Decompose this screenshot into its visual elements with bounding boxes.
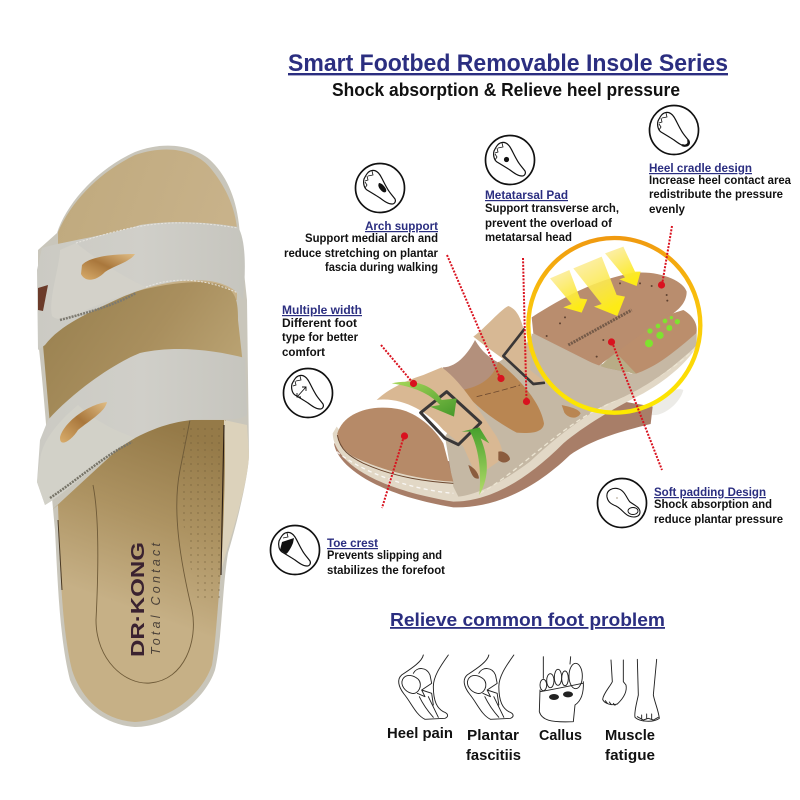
- strap slit: [38, 285, 48, 311]
- text block: multiple width: Different foot: [282, 318, 357, 330]
- label: plantar fascitiis: [466, 728, 521, 764]
- text block: toe crest: [327, 536, 445, 577]
- icon: callus: [539, 657, 583, 722]
- text block: arch support: Support medial arch and: [305, 233, 438, 245]
- icon: toe crest: [270, 526, 320, 574]
- callout line: heel: [658, 226, 672, 289]
- text block: toe crest: stabilizes the forefoot: [327, 565, 445, 577]
- text block: metatarsal pad: prevent the overload of: [485, 218, 612, 230]
- front strap: [37, 222, 245, 350]
- midsole rim: [333, 330, 697, 502]
- yellow pressure arrow right: [605, 247, 641, 286]
- front slots: [498, 451, 510, 463]
- rear slots: [552, 377, 579, 397]
- rear ornament: [60, 402, 107, 443]
- green pressure dots: [645, 316, 680, 347]
- beige rear quarter: [530, 333, 696, 404]
- text block: arch support: fascia during walking: [325, 262, 438, 274]
- subtitle: Shock absorption & Relieve heel pressure: [332, 80, 680, 100]
- left sandal top view: [37, 146, 249, 727]
- logo subtitle: Total Contact: [149, 542, 163, 655]
- text block: multiple width: comfort: [282, 347, 325, 359]
- rear strap: [37, 349, 247, 505]
- midsole stitching: [480, 349, 694, 493]
- text block: toe crest: Toe crest: [327, 536, 378, 550]
- middle lining: [443, 340, 503, 393]
- text block: heel cradle: Increase heel contact area: [649, 175, 792, 187]
- insole perforations: [546, 282, 668, 358]
- icon: arch support: [356, 164, 404, 212]
- text block: multiple width: Multiple width: [282, 303, 362, 317]
- front ornament: [81, 254, 135, 280]
- text block: arch support: [284, 219, 439, 274]
- icon: heel cradle: [650, 106, 698, 154]
- icon: muscle fatigue: [603, 659, 659, 721]
- insole contour: [93, 420, 193, 683]
- text block: multiple width: type for better: [282, 332, 359, 344]
- label: muscle fatigue: [605, 728, 655, 764]
- label: plantar fascitiis: Plantar: [467, 728, 519, 744]
- yellow ring: [528, 238, 700, 413]
- green arrow top: [392, 382, 457, 417]
- icon: heel pain: [399, 655, 448, 719]
- yellow pressure arrow left: [550, 270, 587, 313]
- text block: metatarsal pad: Metatarsal Pad: [485, 188, 568, 202]
- text block: heel cradle: [649, 161, 792, 216]
- text block: arch support: Arch support: [365, 219, 438, 233]
- front lace strap: [377, 367, 502, 477]
- middle footbed: [462, 362, 544, 433]
- text block: soft padding: Shock absorption and: [654, 499, 772, 511]
- right sandal side view: [333, 238, 700, 507]
- text block: heel cradle: Heel cradle design: [649, 161, 752, 175]
- right rim: [221, 420, 249, 572]
- yellow pressure arrow middle: [573, 257, 625, 316]
- front strap tab: [51, 243, 146, 319]
- toe bed: [58, 150, 237, 300]
- text block: metatarsal pad: [485, 188, 619, 244]
- text block: toe crest: Prevents slipping and: [327, 550, 442, 562]
- beige upper: [445, 330, 697, 497]
- text block: metatarsal pad: Support transverse arch,: [485, 203, 619, 215]
- outer sole: [38, 146, 249, 727]
- insole logo: [568, 310, 632, 345]
- text block: multiple width: [282, 303, 362, 359]
- icon: soft padding: [598, 478, 646, 528]
- rear lace strap: [473, 306, 555, 384]
- text block: heel cradle: evenly: [649, 204, 686, 216]
- perforation dots: [180, 425, 222, 600]
- callout line: soft padding: [608, 338, 662, 470]
- text block: arch support: reduce stretching on plantar: [284, 248, 439, 260]
- label: muscle fatigue: Muscle: [605, 728, 655, 744]
- heel foam: [652, 389, 683, 415]
- text block: soft padding: reduce plantar pressure: [654, 514, 783, 526]
- icon: plantar fasciitis: [464, 655, 514, 719]
- rear buckle: [503, 329, 545, 384]
- text block: heel cradle: redistribute the pressure: [649, 189, 783, 201]
- rear insole: [52, 420, 226, 722]
- wedge layer: [600, 352, 637, 374]
- text block: soft padding: [654, 485, 783, 526]
- icon: multiple width: [284, 368, 332, 418]
- icon: metatarsal pad: [486, 136, 534, 184]
- green arrow bottom: [462, 427, 489, 495]
- callout line: arch: [447, 255, 505, 382]
- text block: soft padding: Soft padding Design: [654, 485, 766, 499]
- logo: DR·KONG: [128, 542, 148, 657]
- title: Smart Footbed Removable Insole Series: [288, 50, 728, 77]
- opening between straps: [43, 282, 243, 425]
- callout line: multiple width: [381, 345, 417, 387]
- upper insole: [532, 272, 687, 366]
- wedge outsole: [334, 397, 653, 507]
- label: plantar fascitiis: fascitiis: [466, 748, 521, 764]
- front footbed: [337, 408, 453, 482]
- lower insole layer: [600, 310, 697, 374]
- text block: metatarsal pad: metatarsal head: [485, 232, 572, 244]
- heading: relieve common foot problem: Relieve common foot problem: [390, 610, 665, 630]
- label: muscle fatigue: fatigue: [605, 748, 655, 764]
- callout line: toe crest: [382, 432, 408, 508]
- front buckle: [421, 392, 481, 445]
- label: heel pain: Heel pain: [387, 726, 453, 742]
- callout line: metatarsal: [523, 258, 530, 405]
- label: callus: Callus: [539, 728, 582, 744]
